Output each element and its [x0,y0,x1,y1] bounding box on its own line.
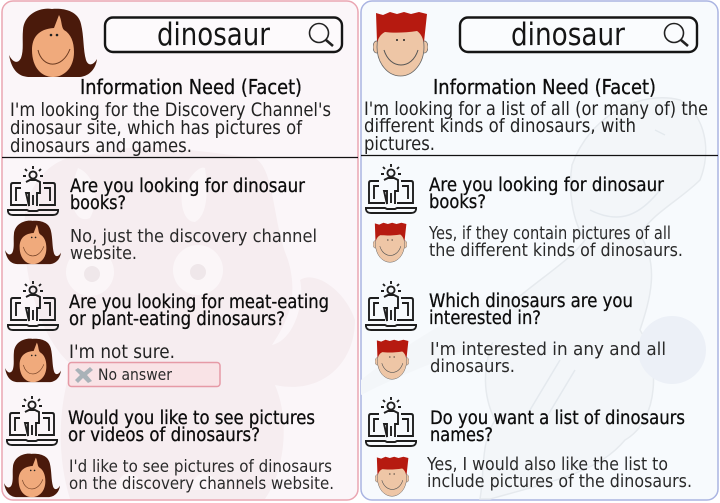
question 2 [429,291,633,329]
question 1: Are you looking for dinosaur [70,176,305,197]
panel: left user [2,1,358,500]
panel: right user [361,1,718,500]
answer 1: Yes, if they contain pictures of all [428,223,671,244]
text block: information need [364,98,708,155]
avatar: boy large [373,12,428,76]
question 2: Which dinosaurs are you [429,291,633,312]
question 1 [70,176,305,214]
search box: right: dinosaur [511,17,625,53]
search box: right [460,17,697,53]
avatar: boy small 2 [375,340,409,379]
answer 3 [69,457,334,493]
question 2: or plant-eating dinosaurs? [69,309,285,330]
background dinosaur: right [361,98,706,499]
icon: laptop assistant 3 [7,396,57,445]
avatar: woman small 1 [5,221,61,264]
text block: information need: dinosaur site, which has pictures of [10,117,303,139]
answer 1 [70,226,317,264]
question 3: names? [430,425,493,446]
text block: information need: pictures. [364,133,435,155]
answer 1: the different kinds of dinosaurs. [429,240,683,261]
question 2 [69,292,329,330]
heading: information need: Information Need (Facet) [433,75,656,99]
answer 1 [428,223,683,261]
question 3: or videos of dinosaurs? [68,425,260,446]
icon: laptop assistant 2 [366,281,416,330]
icon: magnifier [664,24,688,46]
answer 3: Yes, I would also like the list to [426,454,668,475]
question 1: books? [429,192,486,213]
icon: magnifier [310,24,333,46]
icon: laptop assistant 1 [8,166,58,215]
answer 2 [430,339,666,377]
icon: laptop assistant 3 [366,397,416,446]
text block: information need: different kinds of dinosaurs, with [364,115,636,137]
background dinosaur: left [24,147,355,499]
question 1: books? [70,193,126,214]
icon: laptop assistant 1 [366,164,416,213]
answer 2: I'm interested in any and all [430,339,666,360]
answer 3 [426,454,692,492]
avatar: woman large [9,9,97,77]
answer 3: include pictures of the dinosaurs. [427,471,692,492]
answer 3: I'd like to see pictures of dinosaurs [69,457,332,476]
search box: left: dinosaur [157,17,270,53]
avatar: woman small 2 [5,339,61,382]
heading: information need: Information Need (Facet) [80,75,302,99]
text block: information need [10,99,331,157]
avatar: boy small 1 [373,223,407,262]
avatar: woman small 3 [4,454,60,497]
answer 3: on the discovery channels website. [69,474,334,493]
icon: grey x [75,367,93,383]
icon: laptop assistant 2 [8,281,58,330]
question 3: Do you want a list of dinosaurs [430,408,685,429]
answer 2: I'm not sure. [69,341,175,363]
question 1: Are you looking for dinosaur [429,175,664,196]
question 2: interested in? [429,308,541,329]
search box: left [105,17,342,53]
callout: no answer [68,362,220,386]
answer 1: website. [70,243,137,264]
question 3: Would you like to see pictures [68,408,315,429]
answer 1: No, just the discovery channel [70,226,317,247]
question 3 [68,408,315,446]
avatar: boy small 3 [375,457,409,496]
callout: no answer: No answer [98,365,172,384]
text block: information need: dinosaurs and games. [10,135,192,157]
text block: information need: I'm looking for the Discovery Channel's [10,99,331,121]
question 2: Are you looking for meat-eating [69,292,329,313]
answer 2: dinosaurs. [430,356,515,377]
question 3 [430,408,685,446]
question 1 [429,175,664,213]
